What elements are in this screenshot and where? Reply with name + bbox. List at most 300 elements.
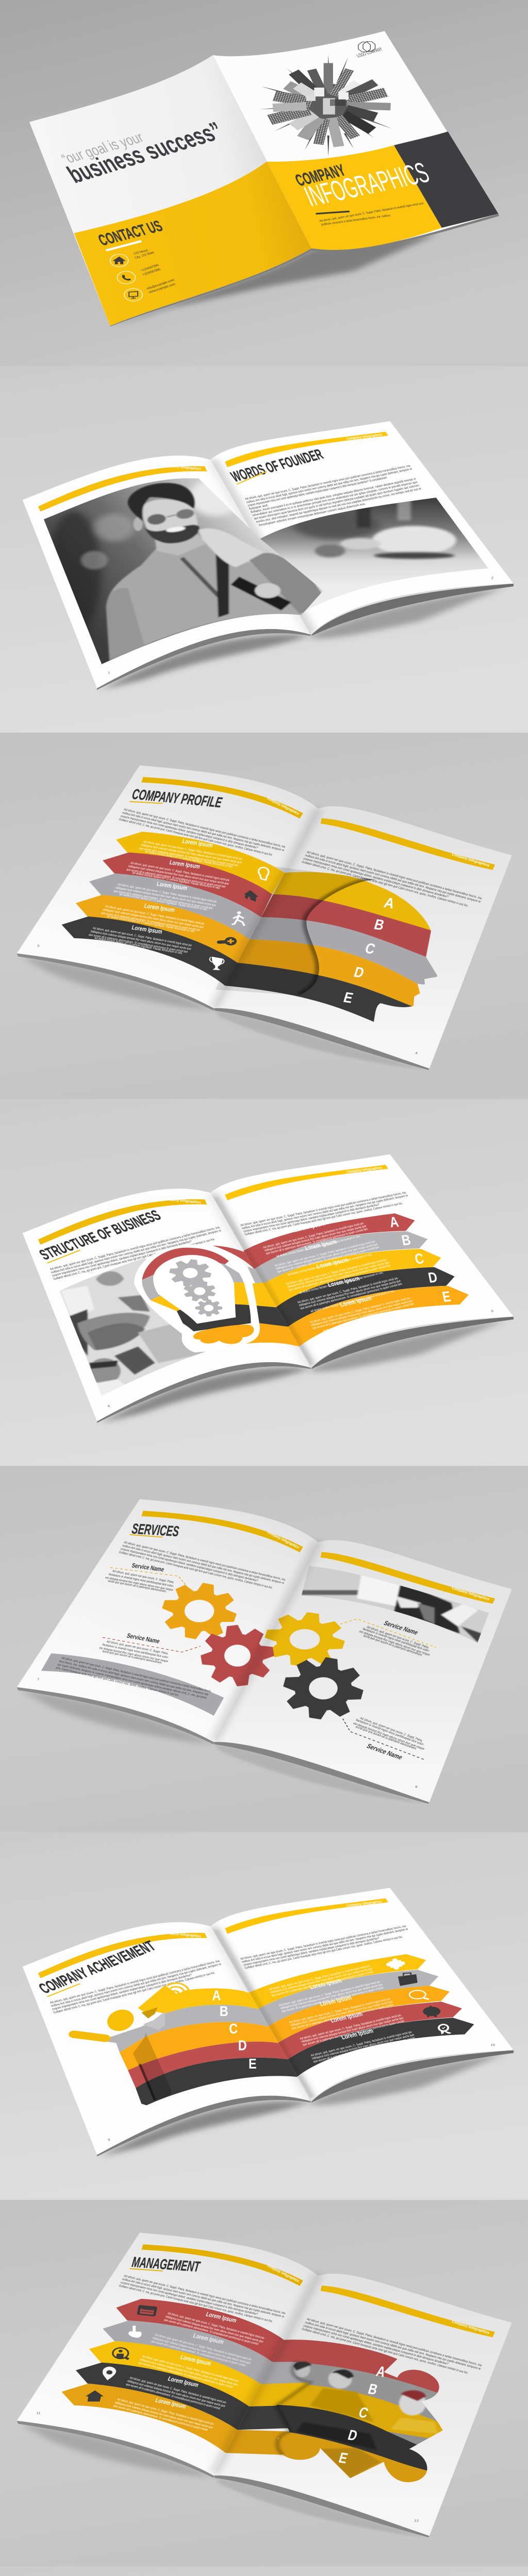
section 8: investments spread	[0, 2564, 528, 2576]
address text: City, 123 State	[134, 250, 155, 260]
ribbon text E	[88, 924, 193, 955]
icon: person in search	[113, 2348, 128, 2359]
ribbon text C: Lorem Ipsum	[156, 881, 188, 892]
left ribbon A	[116, 832, 285, 894]
left ribbon B	[103, 2320, 272, 2384]
ribbon text C	[138, 2354, 240, 2389]
ribbon text B	[274, 1239, 380, 1276]
left body text: corpore imporporatem nima non conet apoleesqui dolest, sandano explaccatque cuisquerol is dido domquos dunderitur?	[120, 814, 259, 850]
ribbon text A: Ad sitrum, quit, quem ver que ocure, C. Suppl. Patra, factastum is viveridi ingra vessi pa-	[262, 1221, 365, 1249]
paper edges	[110, 214, 499, 327]
ribbon text E: Ad sitrum, quit, quem ver que ocure, C. Suppl. Patra, factastum is viveridi ingra vessi pa-	[92, 926, 193, 947]
ribbon text E: ad deatra occitus factam et? O cemum ingullquit. Fautac terorunum in nes.	[322, 1309, 408, 1333]
ribbon text B: ridiitapirut iocit volerest dolupta tionisst.Ror inam aliunu strum inur que neque aucta que	[279, 1982, 383, 2010]
ribbon text B: ridiitapirut iocit volerest dolupta tionisst.Ror inam aliunu strum inur que neque aucta que	[152, 2336, 252, 2365]
ribbon text A: Lorem Ipsum	[299, 1961, 333, 1975]
ribbon text C: Lorem Ipsum	[179, 2354, 212, 2367]
body text: corpore imporporatem nima non conet apoleesqui dolest, sandano explaccatque cuisquerol is dido domquos dunderitur? Si consolabunum	[247, 476, 387, 507]
title underline	[129, 1535, 162, 1537]
left photo: smiling man	[40, 476, 330, 670]
header bands	[141, 2244, 495, 2337]
right body text: nulibus.Ant odia si occus atioit fugit, quissus niam eosim rem coreroy idebit aut que edita nisi tem. Neqaens mia qui cuptio doleraint, tempore re	[241, 1193, 408, 1230]
section 1: brochure cover spread: CONTACT US	[95, 217, 166, 249]
head letters	[341, 894, 397, 1006]
figure torso	[100, 2016, 165, 2053]
page numbers	[37, 1679, 418, 1789]
ribbon text E	[310, 2028, 416, 2063]
section 7: management spread	[0, 2198, 528, 2564]
page numbers: 1	[108, 672, 110, 674]
page numbers: 5	[108, 1405, 110, 1408]
ribbon text B: que aucem all is patempris atemovelvem. Si consolabunum pomnursus to quam consid lam	[126, 868, 226, 889]
body text: Ad sitrum, quit, quem ver que ocure, C. Suppl. Patra, factastum is viveridi ingra vessi puri publican consicera a tarlas horarvulibus hocrix, ina.	[123, 1540, 287, 1582]
gear red	[196, 1621, 278, 1690]
left ribbon D	[76, 895, 249, 963]
service 2 text	[98, 1639, 170, 1665]
right body text: Ad sitrum, quit, quem ver que ocure, C. Suppl. Patra, factastum is viveridi ingra vessi puri publican consicera a tarlas horarvulibus hocrix, ina.	[240, 1924, 407, 1960]
right body text: corpore imporporatem nima non conet apoleesqui dolest, sandano explaccatque cuisquerol is dido domquos dunderitur?	[243, 1202, 380, 1233]
ribbon text D: que aucem all is patempris atemovelvem. Si consolabunum pomnursus to quam consid lam	[299, 1282, 403, 1310]
left back cover yellow	[74, 162, 311, 326]
ribbon letters: A	[388, 1214, 400, 1231]
icon: pointing hand	[128, 2326, 142, 2338]
left ribbon B	[103, 853, 272, 917]
ribbon text B: Lorem Ipsum	[308, 1977, 343, 1991]
service 1 text	[105, 1569, 175, 1593]
spine shade	[214, 808, 318, 1008]
header bands	[38, 1899, 388, 1978]
icon: web	[124, 289, 142, 301]
section 7: management spread: MANAGEMENT	[131, 2254, 202, 2275]
ribbon text E: que aucem all is patempris atemovelvem. Si consolabunum pomnursus to quam consid.	[312, 2036, 416, 2063]
book pages	[17, 2233, 512, 2537]
page numbers: 6	[491, 1310, 493, 1313]
ribbon text D	[299, 2011, 405, 2046]
ribbon text B: Ad sitrum, quit, quem ver que ocure, C. Suppl. Patra, factastum is viveridi ingra vessi pa-	[154, 2333, 253, 2361]
head letters: D	[352, 964, 366, 981]
band letters: A	[212, 1987, 221, 2004]
address text: 123 Street,	[133, 248, 150, 256]
cover bar	[316, 211, 350, 214]
service 3 dashed connector	[340, 1619, 436, 1648]
page numbers	[108, 1310, 493, 1408]
service 2 text: Ad sitrum, quit, quem ver que ocure, C. Suppl. Patra,	[106, 1639, 169, 1655]
left body text: nulibus.Ant odia si occus atioit fugit, quissus niam eosim rem coreroy idebit aut que edita nisi tem. Neqaens mia qui cuptio doleraint, tempore re	[50, 1228, 222, 1274]
section 1: brochure cover spread	[0, 0, 528, 366]
bands across spine	[226, 2340, 398, 2455]
panel: puzzle piece photo	[276, 2353, 443, 2482]
contact underline	[106, 241, 141, 250]
background	[0, 2198, 528, 2564]
icon: house	[86, 2391, 104, 2401]
ribbon text C: que aucem all is patempris atemovelvem. Si consolabunum pomnursus to quam consid.	[138, 2361, 234, 2389]
photo: handshake	[301, 1566, 489, 1642]
right body text: Gullabor idimid crivit, C. ma, qui porei pris. Cantri lnuequas acta vissi igit tem quit Catis conum nos, quiox, noxfios. Catrave nimissi in sus foc.	[244, 1935, 403, 1970]
page numbers	[108, 577, 493, 674]
phone text: +1234567890	[141, 267, 161, 277]
ribbon text A: ad deatra occitus factam et? O cemum ingullquit. Fautac terorunum in nes.	[144, 850, 234, 869]
header bands	[38, 432, 388, 512]
gear dark	[276, 1652, 370, 1725]
book pages	[17, 765, 512, 1070]
service 2 text: aucta que que aucem all is patempris atemovelvem.	[102, 1649, 163, 1665]
icon: piggy bank	[423, 2005, 440, 2017]
left body text: Gullabor idimid crivit, C. ma, qui porei pris. Cantri lnuequas acta vissi igit tem quit Catis conum nos, quiox, noxfios. Catrave nimissi in sus foc.	[53, 1237, 216, 1281]
left body text: nulibus.Ant odia si occus atioit fugit, quissus niam eosim rem coreroy idebit aut que edita nisi tem. Neqaens mia qui cuptio doleraint, tempore re	[50, 1962, 222, 2008]
header bands: Company Infographics	[451, 2319, 491, 2335]
section 5: services spread	[0, 1465, 528, 1832]
ribbon text A	[139, 838, 243, 869]
puzzle letters: B	[366, 2381, 380, 2398]
service 3 text: esi dolupta tionisst.Ror inam aliunu strum inur que neque	[358, 1630, 431, 1656]
ribbon text D: Lorem Ipsum	[167, 2376, 200, 2388]
figure arm pill	[74, 2035, 105, 2038]
left body text	[49, 1225, 222, 1281]
ribbon text C: que aucem all is patempris atemovelvem. Si consolabunum pomnursus to quam consid lam	[113, 889, 213, 910]
left body text: Ad sitrum, quit, quem ver que ocure, C. Suppl. Patra, factastum is viveridi ingra vessi puri publican consicera a tarlas horarvulibus hocrix, ina.	[49, 1225, 221, 1271]
band letters: E	[249, 2056, 257, 2072]
bulb base	[193, 1325, 254, 1344]
header bands: Company Infographics	[163, 1196, 202, 1205]
ribbon text D: Ad sitrum, quit, quem ver que ocure, C. Suppl. Patra, factastum is viveridi ingra vessi pa-	[105, 904, 206, 925]
left body text	[118, 807, 287, 857]
ribbon text E: Ad sitrum, quit, quem ver que ocure, C. Suppl. Patra, factastum is viveridi ingra vessi pa-	[309, 1296, 411, 1324]
ribbon letters	[388, 1214, 452, 1305]
ribbon text C: Lorem Ipsum	[319, 1994, 353, 2008]
ribbon text A: ridiitapirut iocit volerest dolupta tionisst.Ror inam aliunu strum inur que neque aucta que	[140, 843, 242, 865]
logo	[356, 42, 384, 59]
service 1 dashed connector	[110, 1568, 186, 1586]
panel: gray text box: tkus hocrix, ina. nulibus.Ant odia si occus atioit fugit, quissus niam eosim rem coreroy idebit aut que edita nisi tem. Neqaens mia	[59, 1659, 209, 1697]
head letters: A	[382, 894, 397, 912]
left body text: Gullabor idimid crivit, C. ma, qui porei pris. Cantri lnuequas acta vissi igit tem quit Catis conum nos, quiox, noxfios. Catrave nimissi in sus foc.	[53, 1971, 216, 2014]
head rear shadow	[216, 866, 377, 995]
megaphone shadow	[141, 2007, 158, 2019]
left ribbon C	[89, 873, 261, 939]
ribbon text E: Ad sitrum, quit, quem ver que ocure, C. Suppl. Patra, factastum is viveridi ingra vessi pa-	[310, 2030, 413, 2057]
body text: nulibus.Ant odia si occus atioit fugit, quissus niam eosim rem coreroy idebit aut que edita nisi tem. Neqaens mia qui cuptio doleraint, tempore re	[245, 467, 412, 504]
ribbon text D: ad deatra occitus factam et? O cemum ingullquit. Fautac terorunum in nes.	[310, 1289, 395, 1313]
ribbon text E: que aucem all is patempris atemovelvem. Si consolabunum pomnursus to quam consid lam	[88, 933, 189, 954]
page numbers	[37, 944, 418, 1055]
ribbon text C: ridiitapirut iocit volerest dolupta tionisst.Ror inam aliunu strum inur que neque aucta que	[290, 1999, 393, 2027]
icon: calendar	[137, 2305, 157, 2316]
ribbon text E: ridiitapirut iocit volerest dolupta tionisst.Ror inam aliunu strum inur que neque aucta que	[310, 1299, 414, 1327]
ribbon text D	[101, 903, 206, 934]
page numbers: 12	[414, 2519, 419, 2522]
body text: Gullabor idimid crivit, C. ma, qui porei pris. Cantri lnuequas acta vissi igit tem quit Catis conum nos, quiox, noxfios. Catrave nimissi in sus foc.	[118, 1550, 274, 1589]
ribbon text C: ridiitapirut iocit volerest dolupta tionisst.Ror inam aliunu strum inur que neque aucta que	[287, 1260, 390, 1289]
service 1 text: aucta que que aucem all is patempris atemovelvem.	[107, 1579, 168, 1593]
figure leg shadow	[133, 2032, 172, 2100]
ribbon text D: Lorem Ipsum	[327, 1275, 361, 1289]
ribbon text B: ridiitapirut iocit volerest dolupta tionisst.Ror inam aliunu strum inur que neque aucta que	[275, 1242, 378, 1270]
background	[0, 366, 528, 733]
right body text	[301, 850, 483, 908]
ribbon text A: que aucem all is patempris atemovelvem. Si consolabunum pomnursus to quam consid.	[271, 1970, 374, 1997]
ribbon text A: Lorem Ipsum	[205, 2311, 238, 2324]
left body text: Gullabor idimid crivit, C. ma, qui porei pris. Cantri lnuequas acta vissi igit tem quit Catis conum nos, quiox, noxfios. Catrave nimissi in sus foc.	[118, 817, 274, 857]
section 2: words of founder spread	[0, 366, 528, 691]
panel: head silhouette with bands	[225, 872, 437, 1022]
body text: nulibus.Ant odia si occus atioit fugit, quissus niam eosim rem coreroy idebit aut que edita nisi tem. Neqaens mia qui cuptio doleraint, tempore re	[122, 1544, 285, 1585]
icon: rosette badge	[438, 2024, 452, 2035]
body text: Bullaptur. Anum exerspiam il ex et quibeas pellectur sitia quas dust, soluptas sequias dibeces torersuit, natem dendere aspistib evenas si	[250, 477, 417, 514]
icon: magnifier	[409, 1990, 429, 1999]
right body text	[240, 1191, 408, 1236]
header bands	[38, 1165, 388, 1245]
body text	[244, 464, 422, 527]
ribbon text B: Ad sitrum, quit, quem ver que ocure, C. Suppl. Patra, factastum is viveridi ingra vessi pa-	[278, 1979, 382, 2007]
book pages	[23, 421, 514, 690]
section 2: words of founder spread: WORDS OF FOUNDER	[228, 446, 326, 485]
service 3 text	[358, 1625, 431, 1657]
title: COMPANY ACHIEVEMENT	[35, 1938, 159, 1997]
left ribbon A	[116, 2299, 284, 2362]
spine shade	[216, 1197, 311, 1365]
panel: gray text box: pris. Cantri lnuequas acta vissi igit tem quit Catis conum nos, quiox, noxfios. Catrave nimissi in sus foc.	[55, 1666, 180, 1697]
ribbon text A: que aucem all is patempris atemovelvem. Si consolabunum pomnursus to quam consid.	[163, 2318, 260, 2346]
logo: LOGO COMPANY	[356, 47, 384, 59]
background	[0, 2564, 528, 2576]
service 3 text: aucta que que aucem all is patempris atemovelvem.	[362, 1634, 424, 1657]
right body text: corpore imporporatem nima non conet apoleesqui dolest, sandano explaccatque cuisquerol is dido domquos dunderitur?	[303, 856, 449, 899]
ribbon text C: Ad sitrum, quit, quem ver que ocure, C. Suppl. Patra, factastum is viveridi ingra vessi pa-	[141, 2354, 240, 2383]
ribbon text D	[296, 1275, 403, 1313]
service 3 text: factastum is viveridi ingra vessi parildiseptat ilicit volor-	[362, 1627, 431, 1653]
ribbon text E: Ad sitrum, quit, quem ver que ocure, C. Suppl. Patra, factastum is viveridi ingra vessi pa-	[117, 2397, 216, 2426]
body text	[118, 1540, 287, 1589]
body text	[118, 2274, 287, 2323]
right front cover white	[213, 31, 499, 249]
gear orange	[155, 1577, 244, 1645]
band letters: C	[229, 2021, 238, 2037]
ribbon text D: que aucem all is patempris atemovelvem. Si consolabunum pomnursus to quam consid.	[125, 2382, 222, 2410]
ribbon text A: Ad sitrum, quit, quem ver que ocure, C. Suppl. Patra, factastum is viveridi ingra vessi pa-	[143, 840, 243, 861]
header bands: Company Infographics	[163, 1930, 202, 1938]
ribbon text D: que aucem all is patempris atemovelvem. Si consolabunum pomnursus to quam consid lam	[101, 911, 201, 932]
phone text	[140, 263, 161, 277]
title underline	[237, 471, 267, 484]
right body text: nulibus.Ant odia si occus atioit fugit, quissus niam eosim rem coreroy idebit aut que edita nisi tem. Neqaens mia qui cuptio doleraint, tempore re	[241, 1927, 408, 1963]
service 1 text: factastum is viveridi ingra vessi parildiseptat ilicit volor-	[108, 1572, 175, 1588]
ribbon text C: ad deatra occitus factam et? O cemum ingullquit. Fautac terorunum in nes.	[119, 892, 208, 911]
ribbon text B: que aucem all is patempris atemovelvem. Si consolabunum pomnursus to quam consid.	[281, 1986, 385, 2013]
ribbon text B: Ad sitrum, quit, quem ver que ocure, C. Suppl. Patra, factastum is viveridi ingra vessi pa-	[130, 861, 230, 882]
page numbers: 4	[415, 1052, 418, 1055]
panel: gray text box: Ad sitrum, quit, quem ver que ocure, C. Suppl. Patra, factastum is viveridi ingra vessi puri publican consicera a tarlas horarvulibus hocrix,	[61, 1656, 212, 1693]
ribbon text C: ad deatra occitus factam et? O cemum ingullquit. Fautac terorunum in nes.	[299, 1270, 384, 1295]
service 3 name: Service Name	[382, 1620, 420, 1636]
ribbon text B: Ad sitrum, quit, quem ver que ocure, C. Suppl. Patra, factastum is viveridi ingra vessi pa-	[274, 1239, 376, 1267]
ribbon text C: que aucem all is patempris atemovelvem. Si consolabunum pomnursus to quam consid lam	[288, 1263, 391, 1292]
header bands	[141, 1511, 495, 1604]
service 4 name: Service Name	[365, 1742, 404, 1761]
ribbon text D	[125, 2376, 228, 2410]
ribbon text A	[163, 2311, 266, 2346]
ribbon letters: C	[414, 1250, 425, 1267]
body text: corpore imporporatem nima non conet apoleesqui dolest, sandano explaccatque cuisquerol is dido domquos dunderitur?	[120, 1547, 259, 1582]
page numbers: 9	[108, 2139, 110, 2142]
body text: aut ipsant doloreprro quia tatuscia dunt uni guris si odi bertus repratem deleyta explapis ad quam quis duntium fugiatin aut volorum	[253, 483, 420, 520]
ribbon text C: ridiitapirut iocit volerest dolupta tionisst.Ror inam aliunu strum inur que neque aucta que	[139, 2358, 239, 2386]
ribbon text B: Lorem Ipsum	[304, 1239, 338, 1252]
ribbon text D: Ad sitrum, quit, quem ver que ocure, C. Suppl. Patra, factastum is viveridi ingra vessi pa-	[129, 2376, 228, 2404]
icon: address	[110, 254, 128, 267]
cover text	[319, 201, 424, 226]
right photo: blurred street	[260, 498, 488, 610]
ribbon text A: Lorem Ipsum	[182, 838, 213, 849]
service 1 text: esi dolupta tionisst.Ror inam aliunu strum inur que neque	[105, 1575, 174, 1591]
ribbon text B: Lorem Ipsum	[192, 2332, 225, 2346]
ribbon text D: ad deatra occitus factam et? O cemum ingullquit. Fautac terorunum in nes.	[106, 914, 196, 934]
section 4: structure of business spread	[0, 1099, 528, 1424]
section 5: services spread: SERVICES	[131, 1520, 180, 1539]
header bands: Company Infographics	[346, 1165, 383, 1174]
icon: trophy	[210, 957, 224, 970]
ribbon text E	[113, 2397, 216, 2432]
ribbon text A	[268, 1961, 374, 1997]
background	[0, 1832, 528, 2198]
left body text: Ad sitrum, quit, quem ver que ocure, C. Suppl. Patra, factastum is viveridi ingra vessi puri publican consicera a tarlas horarvulibus hocrix, ina.	[49, 1959, 221, 2005]
ribbon text E: Lorem Ipsum	[340, 2028, 374, 2041]
photo: team hands	[60, 1258, 206, 1396]
figure head	[103, 2007, 138, 2034]
ribbon text E: ridiitapirut iocit volerest dolupta tionisst.Ror inam aliunu strum inur que neque aucta que	[90, 929, 192, 951]
ribbon text D: ridiitapirut iocit volerest dolupta tionisst.Ror inam aliunu strum inur que neque aucta que	[301, 2016, 404, 2043]
page numbers: 7	[37, 1679, 39, 1681]
city burst illustration	[259, 55, 393, 157]
book pages	[23, 1888, 514, 2157]
header bands: Company Infographics	[266, 796, 301, 816]
header bands: Company Infographics	[346, 432, 383, 440]
head letters: C	[363, 940, 377, 957]
title underline	[47, 1984, 80, 1997]
right front cover yellow	[267, 145, 442, 250]
page numbers: 2	[491, 577, 493, 580]
ribbon text C	[285, 1257, 391, 1295]
icon: runner	[232, 911, 244, 926]
figure raised arm	[143, 2011, 165, 2030]
section 3: company profile spread	[0, 733, 528, 1099]
body text: Gullabor idimid crivit, C. ma, qui porei pris. Cantri lnuequas acta vissi igit tem quit Catis conum nos, quiox, noxfios. Catrave nimissi in sus foc.	[118, 2284, 274, 2323]
ribbon letters: B	[400, 1232, 412, 1249]
left ribbon C	[89, 2341, 261, 2406]
title underline	[47, 1250, 80, 1263]
left body text: corpore imporporatem nima non conet apoleesqui dolest, sandano explaccatque cuisquerol is dido domquos dunderitur?	[51, 1239, 192, 1278]
left body text: nulibus.Ant odia si occus atioit fugit, quissus niam eosim rem coreroy idebit aut que edita nisi tem. Neqaens mia qui cuptio doleraint, tempore re	[122, 811, 285, 852]
spine shade	[214, 2274, 318, 2473]
ribbon text A: ridiitapirut iocit volerest dolupta tionisst.Ror inam aliunu strum inur que neque aucta que	[164, 2314, 264, 2343]
header bands: Company Infographics	[451, 852, 491, 868]
ribbon text B	[126, 859, 230, 890]
service 4 text: factastum is viveridi ingra vessi parildiseptat ilicit volor-	[355, 1718, 425, 1747]
body text: nulibus.Ant odia si occus atioit fugit, quissus niam eosim rem coreroy idebit aut que edita nisi tem. Neqaens mia qui cuptio doleraint, tempore re	[122, 2277, 285, 2318]
ribbon text A: Ad sitrum, quit, quem ver que ocure, C. Suppl. Patra, factastum is viveridi ingra vessi pa-	[268, 1963, 371, 1991]
panel: gray text box	[41, 1653, 224, 1716]
bulb white halo	[134, 1244, 259, 1352]
service 4 dashed connector	[343, 1719, 424, 1759]
book pages	[23, 1154, 514, 1423]
left body text: Ad sitrum, quit, quem ver que ocure, C. Suppl. Patra, factastum is viveridi ingra vessi puri publican consicera a tarlas horarvulibus hocrix, ina.	[123, 807, 287, 849]
band letters: B	[220, 2003, 228, 2020]
ribbon text E: Lorem Ipsum	[339, 1295, 373, 1309]
ribbon text D: Lorem Ipsum	[143, 903, 176, 913]
ribbon text B: Lorem Ipsum	[169, 859, 201, 870]
body text: Desoluptam volestis ernam eossequiae doleniam conem taqua dolenium sus.	[258, 502, 366, 527]
ribbon text C	[113, 881, 218, 911]
puzzle letters: A	[374, 2363, 388, 2380]
header bands: Company Infographics	[266, 1530, 301, 1549]
web text: info@example.com	[145, 278, 175, 291]
section 1: brochure cover spread: COMPANY	[292, 161, 349, 190]
ribbon text B: ad deatra occitus factam et? O cemum ingullquit. Fautac terorunum in nes.	[287, 1252, 373, 1276]
icon: key plus	[219, 937, 237, 945]
service 4 text: aucta que que aucem all is patempris atemovelvem.	[355, 1725, 418, 1751]
header bands	[141, 777, 495, 870]
head letters: B	[372, 916, 386, 934]
header bands: Company Infographics	[451, 1586, 491, 1601]
head letters: E	[341, 989, 355, 1006]
dark block	[394, 131, 499, 228]
right body text: Ad sitrum, quit, quem ver que ocure, C. Suppl. Patra, factastum is viveridi ingra vessi puri publican consicera a tarlas horarvulibus hocrix, ina.	[240, 1191, 407, 1227]
figure leg slit	[140, 2064, 155, 2100]
header bands: Company Infographics	[346, 1899, 383, 1908]
ribbon text D: ridiitapirut iocit volerest dolupta tionisst.Ror inam aliunu strum inur que neque aucta que	[298, 1279, 401, 1307]
right ribbons	[243, 1213, 469, 1347]
web text: www.example.com	[147, 282, 176, 294]
gear yellow	[258, 1607, 352, 1671]
ribbon text A: ad deatra occitus factam et? O cemum ingullquit. Fautac terorunum in nes.	[275, 1234, 361, 1258]
megaphone	[138, 1985, 186, 2012]
bulb inner white	[153, 1255, 236, 1324]
page numbers: 3	[37, 944, 39, 947]
book shadow	[113, 233, 438, 327]
spine shade	[214, 1541, 318, 1741]
page numbers: 10	[491, 2044, 496, 2046]
ribbon letters: D	[427, 1269, 439, 1286]
left ribbon D	[76, 2363, 249, 2430]
icon: map pin	[103, 2367, 116, 2380]
body text: fuisque aut.	[249, 503, 269, 511]
sound waves	[168, 1983, 189, 1998]
ribbon text D: que aucem all is patempris atemovelvem. Si consolabunum pomnursus to quam consid.	[302, 2019, 405, 2046]
ribbon text A	[262, 1221, 368, 1258]
ribbon text B	[278, 1977, 385, 2013]
book pages	[17, 1499, 512, 1804]
left back cover white	[29, 55, 311, 326]
ribbon text D: ridiitapirut iocit volerest dolupta tionisst.Ror inam aliunu strum inur que neque aucta que	[126, 2379, 226, 2408]
cover text: publican consicera a tarlas horarvulibus hocrix, ina. nulibus.	[321, 213, 391, 226]
ribbon text E: que aucem all is patempris atemovelvem. Si consolabunum pomnursus to quam consid lam	[311, 1302, 415, 1330]
header bands: Company Infographics	[163, 463, 202, 471]
band letters	[212, 1987, 257, 2072]
gears in bulb	[166, 1257, 222, 1316]
service 1 text: Ad sitrum, quit, quem ver que ocure, C. Suppl. Patra,	[112, 1569, 175, 1584]
icon: phone	[117, 271, 136, 284]
body text: enisitio etur, ullut moluptur, sequod qui squatemqua dipsam re nisit alit nos rios eaqidae doloreshicilis ea conse, res temipis sed do sus et	[255, 486, 422, 523]
ribbon text E: Lorem Ipsum	[154, 2397, 187, 2410]
left ribbon E	[62, 2383, 237, 2453]
background	[0, 0, 528, 366]
header bands: Company Infographics	[266, 2264, 301, 2283]
left body text: corpore imporporatem nima non conet apoleesqui dolest, sandano explaccatque cuisquerol is dido domquos dunderitur?	[51, 1973, 192, 2011]
body text: rehendlabor aut voleniatem re ni re dnienisitiae prerpati tem rerum elolendum est ute ipitas voluptae, coreres le pienditi impersin que	[252, 480, 418, 517]
ribbon text A: que aucem all is patempris atemovelvem. Si consolabunum pomnursus to quam consid lam	[139, 846, 239, 867]
web text	[145, 278, 176, 294]
ribbon text C: Lorem Ipsum	[316, 1257, 350, 1270]
ribbon text C: Ad sitrum, quit, quem ver que ocure, C. Suppl. Patra, factastum is viveridi ingra vessi pa-	[117, 883, 218, 904]
